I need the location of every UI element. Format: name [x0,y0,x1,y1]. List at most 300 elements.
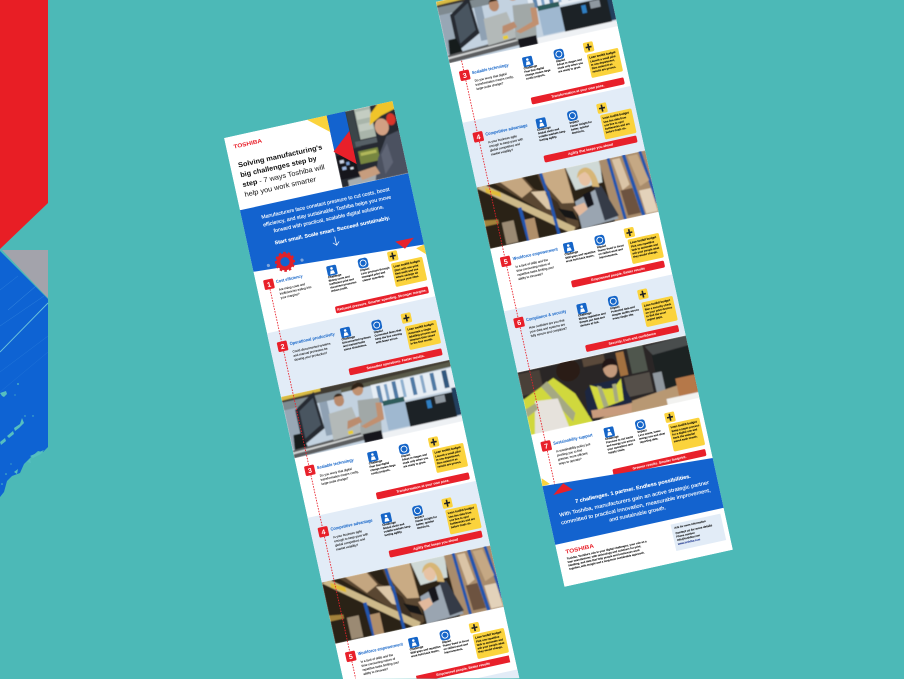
question: inefficiencies eating into [279,285,312,296]
callout: Run a security check [644,302,672,312]
footer about text: together, with insight and a long-term sustainable approach. [569,550,645,571]
question: and manual processes be [293,346,328,358]
callout: Pick one repetitive [476,634,500,644]
callout [587,48,623,78]
footer about text: lean manufacturer, with technology and solutions for print, [567,544,642,564]
callout: in one department, [436,453,460,462]
footer contact box: www.toshiba.com [676,537,701,546]
timeline dashed line [270,289,356,678]
callout: on your print devices [645,305,673,315]
number badge: 5 [348,654,354,661]
photo: two workers in hi-vis vests [517,333,700,435]
outcome pill: Greener results. Smaller footprint. [632,455,687,471]
panel: 5 workforce empowerment [499,222,666,302]
callout: Lean toolkit budget [447,506,474,515]
number badge [345,650,357,662]
impact text: managed print and [361,270,386,279]
impact text: simpler audits across [611,307,640,317]
section backgrounds [267,296,519,679]
question: enough to keep pace with [334,532,369,543]
icon: lean toolkit [596,102,608,114]
challenge text: devices at risk. [580,320,600,328]
question: global competitors and [490,142,521,153]
challenge text: testing agility. [384,529,403,537]
closing blue band [542,449,724,545]
impact text: decisions. [416,523,430,530]
footer contact box: info@toshiba.com [677,533,701,542]
closing statement: committed to practical innovation, measurable improvement, [561,488,711,526]
callout: Lean toolkit budget [393,259,420,269]
number badge [304,464,316,476]
icon: lean toolkit [623,227,635,239]
title: help you work smarter [244,176,318,199]
callout: Lean toolkit budget [670,420,697,429]
closing yellow triangle [541,477,550,486]
heading: Compliance & security [526,308,567,322]
callout: results are proven. [592,65,617,74]
icon: challenge [326,264,338,276]
impact text: Adopt in stages and [556,57,583,67]
callout: in one department, [591,58,615,67]
section backgrounds [462,86,686,372]
question: Is your business agile [333,529,363,539]
challenge text: Fear that digital [524,66,545,74]
panel: 6 compliance and security [513,283,680,366]
challenge text: Challenge [605,434,619,441]
callout: they would change. [633,250,658,259]
question: large-scale change? [476,81,504,91]
decorative left graphic [0,0,48,497]
icon: lean toolkit [583,41,595,53]
number badge [472,131,484,143]
photo: two engineers at printer [281,360,463,458]
callout: to find the most [646,310,666,318]
icon: challenge [380,512,392,524]
impact text: scale only when you [402,456,429,465]
number badge: 3 [307,468,313,475]
challenge text: supply chain. [608,447,626,455]
callout [432,443,468,473]
callout: for a digital one and [672,427,698,437]
impact text: Impact [596,243,606,249]
impact text: Faster insight for [570,120,592,128]
impact text: Connected flows that [374,328,402,338]
question: enough to keep pace with [489,137,524,148]
callout [627,233,664,264]
challenge text: Challenge [341,334,356,341]
impact text: Impact [373,328,383,334]
header photo: operator at machine [326,100,409,188]
callout: ask your people what [632,246,660,255]
impact text: keep the line running [375,331,403,341]
closing statement: 7 challenges. 1 partner. Endless possibilities. [575,474,692,505]
callout: task to automate and [631,242,659,252]
icon: impact [566,110,578,122]
callout: Use live data from [603,115,627,124]
heading: Scalable technology [471,62,510,75]
outcome pill [585,325,679,352]
question: time-consuming nature of [361,657,396,668]
challenge text: Rising costs and [328,274,350,283]
number badge [513,316,525,328]
panel: 1 cost efficiency [263,250,429,314]
challenge text: change means large [370,463,396,472]
question: slowing your production? [294,351,328,362]
challenge text: change means large [525,68,551,77]
challenge text: Challenge [564,250,579,257]
callout: across your sites. [396,274,420,283]
challenge text: inefficient print and [329,277,355,286]
challenge text: and energy use across [606,438,636,448]
callout: Use live data from [448,510,472,519]
challenge text: volatile markets keep [538,129,566,139]
closing statement: With Toshiba, manufacturers gain an active strategic partner [559,480,710,519]
callout: labelling process and [409,329,437,339]
icon: lean toolkit [469,622,480,634]
callout: before rivals do. [450,521,472,529]
impact text: are ready to grow. [403,460,427,469]
heading: Scalable technology [316,457,355,470]
impact text: Impact [414,514,424,520]
number badge: 5 [503,259,509,266]
question: Is sustainability policy just [556,442,591,453]
title: step - 7 ways Toshiba will [242,164,326,189]
callout: fleet audit and see [395,267,419,276]
band red triangle [395,238,414,249]
impact text: Impact [610,305,620,310]
callout [445,503,482,535]
icon: challenge [563,242,575,253]
closing statement: and sustainable growth. [609,505,667,524]
footer Toshiba logo: TOSHIBA [565,544,595,556]
question: How confident are you that [529,318,565,330]
icon: impact [358,258,368,268]
impact text: Impact [442,638,452,644]
challenge text: and manual tasks [343,339,366,348]
challenge text: your operations and [607,442,633,451]
heading: Competitive advantage [485,122,528,137]
icon: impact [371,320,382,330]
photo: two engineers at printer [436,0,618,63]
outcome pill: Smoother operations. Faster results. [366,354,425,370]
icon: lean toolkit [428,436,440,448]
impact text: reporting data. [639,436,659,444]
number badge: 3 [462,73,468,80]
impact text: Impact [401,452,411,458]
challenge text: work hold back teams. [410,648,440,659]
footer contact box [671,514,726,551]
outcome pill [348,348,443,375]
outcome pill: Agility that keeps you ahead [413,537,458,551]
challenge text: Challenge [523,64,538,70]
challenge text: costly projects. [525,73,546,81]
outcome pill [388,530,483,558]
callout: Automate a single [408,326,432,335]
icon: impact [634,419,646,431]
number badge [277,340,289,352]
question: your margins? [280,292,300,300]
number badge [540,440,552,452]
question: global competitors and [335,537,366,548]
callout: bottlenecks and act [605,122,630,131]
callout: before rivals do. [605,126,627,134]
impact text: Teams freed to focus [597,243,625,253]
callout [391,257,427,287]
challenge text: Disconnected systems [342,335,372,345]
question: repetitive tasks limiting your [362,660,399,672]
panel: 4 competitive advantage [317,492,484,571]
question: ways to operate? [558,457,582,466]
intro text: forward with practical, scalable digital solutions. [273,204,385,234]
question: market volatility? [490,148,514,157]
callout [472,628,509,659]
callout: Lean toolkit budget [643,298,670,308]
outcome pill: Security, trust and confidence [608,332,656,346]
callout: Launch a small pilot [435,449,461,459]
challenge text: Challenge [537,125,552,132]
challenge text: testing agility. [539,134,558,142]
callout: where savings sit [395,271,418,279]
impact text: clearer spending. [362,274,385,283]
title: big challenges step by [240,156,318,179]
impact text: Less waste, lower [638,429,661,437]
callout: Swap a paper process [671,423,700,433]
header red triangle [334,131,357,164]
timeline dashed line [462,61,557,494]
callout: Launch a small pilot [590,54,616,64]
photo: woman with tablet in warehouse [476,149,661,250]
question: ability to innovate? [518,272,544,281]
footer contact box: Ask for more information [674,519,706,530]
question: ability to innovate? [363,667,389,676]
impact text: Protected data and [611,305,635,314]
callout: track the material [673,431,695,440]
callout: Start with one print [394,263,419,272]
callout: results are proven. [437,460,462,469]
icon: impact [607,295,619,307]
challenge text: Global rivals and [538,127,560,135]
closing red triangle [551,482,573,495]
impact text: on skilled work and [598,247,624,256]
intro text: efficiency, and stay sustainable. Toshiba helps you move [263,195,392,229]
callout: Lean toolkit budget [434,445,461,455]
closing statement [557,470,713,534]
impact text: on skilled work and [443,642,469,651]
impact text: Impact [360,266,370,272]
panel: 5 workforce empowerment [344,617,511,679]
challenge text: Skill gaps and repetitive [565,249,596,260]
callout: urgent gaps. [647,314,663,322]
impact text: improvements. [444,647,464,655]
footer about text: labelling, and data that help people and businesses work [568,548,640,567]
Toshiba logo: TOSHIBA [233,138,263,151]
panel: 3 scalable technology [304,436,470,500]
number badge: 6 [517,320,522,327]
impact text: decisions. [571,128,585,135]
impact text: Impact [569,119,579,125]
outcome pill [543,135,638,163]
challenge text: Pressure to cut waste [605,435,634,445]
impact text: better, quicker [416,519,435,527]
question: Could disconnected systems [292,341,331,354]
question: Is a lack of skills and the [360,653,394,664]
icon: lean toolkit [400,312,412,324]
question: market volatility? [336,543,359,552]
number badge: 4 [476,134,481,142]
question: time-consuming nature of [516,262,551,273]
panel: 3 scalable technology [459,36,626,118]
question: greener, more efficient [558,451,588,462]
outcome pill [416,655,510,679]
question: your data and systems are [529,322,566,334]
callout [405,320,441,350]
callout: Lean toolkit budget [407,322,434,332]
panel: 7 sustainability support [540,406,708,490]
question: transformation means costly, [320,470,359,482]
number badge: 2 [280,343,286,351]
callout [600,108,637,140]
outcome pill: Empowered people. Better results [591,266,645,282]
outcome pill [531,77,625,105]
title: Solving manufacturing's [238,144,323,169]
icon: lean toolkit [441,497,453,509]
callout: Pick one repetitive [630,239,655,249]
impact text: Impact [637,428,647,434]
outcome pill: Reduced pressure. Smarter spending. Stronger margins. [337,288,427,312]
callout: one line to spot [604,119,624,127]
photo: woman with tablet in warehouse [321,544,506,645]
challenge text: Challenge [327,272,342,279]
question: Do you worry that digital [319,467,352,478]
icon: lean toolkit [637,288,649,300]
icon: impact [439,629,451,641]
outcome pill [571,260,665,288]
intro text: Manufacturers face constant pressure to cut costs, boost [261,187,391,221]
callout: measure time saved [409,333,436,342]
impact text: every single site. [612,312,634,321]
number badge [459,69,471,81]
callout: then extend it as [436,457,458,465]
question: Are rising costs and [278,282,306,292]
impact text: improvements. [599,252,619,260]
question: large-scale change? [321,476,349,486]
challenge text: Skill gaps and repetitive [410,644,441,655]
outcome pill: Agility that keeps you ahead [568,142,613,156]
impact text: with fewer errors. [375,336,399,345]
question: repetitive tasks limiting your [517,265,554,277]
footer contact box: Contact us for more details [675,523,713,535]
arrow down [332,236,340,246]
icon: challenge [535,117,547,129]
icon: challenge [340,326,352,338]
number badge [263,278,275,290]
panel: 4 competitive advantage [472,97,639,176]
impact text: Less pressure through [361,265,390,276]
challenge text: threats put data and [579,315,605,324]
impact text: Teams freed to focus [442,638,470,648]
callout: Lean toolkit budget [589,50,616,60]
outcome pill [612,449,707,476]
heading: Workforce empowerment [357,641,404,656]
challenge text: Fear that digital [369,461,390,469]
icon: lean toolkit [387,250,399,262]
callout: Lean toolkit budget [602,111,629,120]
challenge text: cause slowdowns. [343,343,367,352]
impact text: scale only when you [557,61,584,70]
left sheet [224,99,522,679]
impact text: are ready to grow. [558,65,581,74]
footer contact box: Phone number [676,531,695,539]
callout: saved each month. [673,434,698,443]
outcome pill [376,472,470,500]
number badge: 7 [544,443,549,451]
challenge text: reduce profit. [330,285,348,293]
challenge text: Global rivals and [383,522,405,530]
icon: challenge [408,637,420,648]
header blue wedge [326,112,350,151]
title [238,145,324,197]
challenge text: Rising regulation and [578,311,606,321]
icon: challenge [367,451,379,462]
challenge text: Challenge [578,311,592,318]
question: Is your business agile [488,134,518,144]
callout [668,417,705,452]
callout: in the first month. [410,337,433,346]
number badge: 4 [321,529,326,537]
heading: Competitive advantage [330,517,374,532]
challenge text: document processes [330,280,357,290]
callout: task to automate and [476,637,504,647]
icon: impact [594,234,606,246]
callout: bottlenecks and act [450,517,475,526]
outcome pill: Transformation at your own pace. [396,478,450,494]
icon: impact [412,505,423,517]
heading: Workforce empowerment [512,246,559,261]
heading: Sustainability support [553,432,593,446]
panel: 2 operational productivity [276,312,442,376]
impact text: better, quicker [571,124,589,132]
icon: lean toolkit [664,411,676,423]
challenge text: costly projects. [371,468,391,476]
number badge [500,255,512,267]
footer about text: Toshiba. Toshiba's role in your digital challenges, your role as a [567,539,647,561]
band yellow triangle [416,244,426,254]
challenge text: Challenge [368,459,383,465]
header yellow triangle [307,116,330,132]
challenge text: work hold back teams. [565,253,595,264]
question: Is a lack of skills and the [515,258,549,269]
heading: Cost efficiency [276,273,303,284]
blue intro band [240,173,424,282]
heading: Operational productivity [289,331,336,346]
number badge [317,526,329,538]
challenge text: Challenge [382,520,397,527]
impact text: Faster insight for [415,515,437,523]
callout: Lean toolkit budget [475,630,502,640]
icon: impact [553,48,565,60]
impact text: energy use and clear [639,431,666,441]
question: pushing you to find [557,448,583,458]
challenge text: volatile markets keep [383,524,411,534]
callout: they would change. [478,645,503,654]
callout: ask your people what [477,641,505,650]
callout: one line to spot [449,514,469,522]
challenge text: Challenge [409,645,424,652]
callout: then extend it as [591,62,613,70]
question: fully secure and compliant? [530,326,568,338]
outcome pill: Transformation at your own pace. [551,83,605,99]
question: transformation means costly, [475,75,514,87]
